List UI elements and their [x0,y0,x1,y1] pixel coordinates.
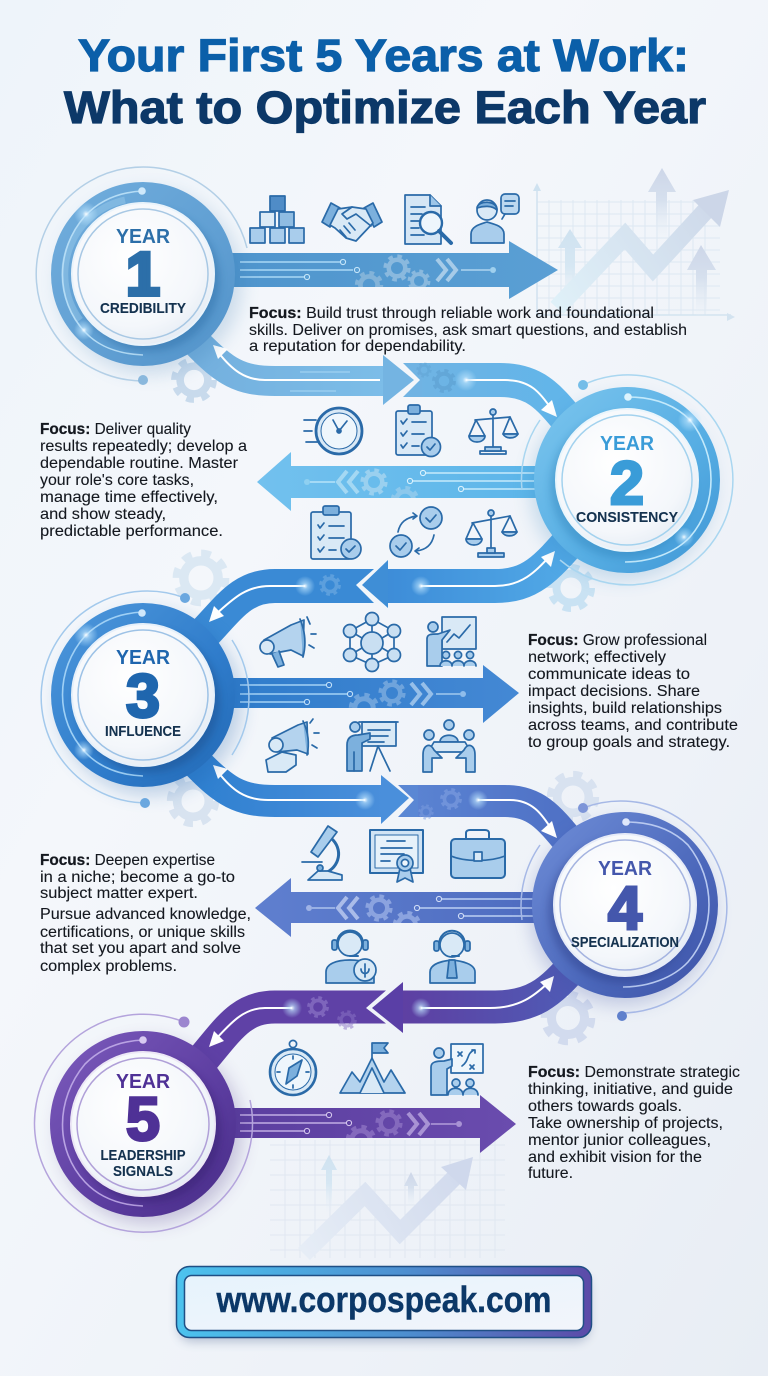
footer url box [176,1266,592,1342]
icon: strategist with plan [431,1044,483,1095]
focus text: year 5: and exhibit vision for the [528,1149,702,1166]
badge: year 3: YEAR [116,646,170,669]
arrow: year 2 [257,452,545,512]
badge: year 2: YEAR [600,432,654,455]
focus text: year 4: that set you apart and solve [40,940,241,957]
focus text: year 2: predictable performance. [40,523,223,540]
icon: certificate [370,830,423,882]
focus text: year 2: your role's core tasks, [40,472,194,489]
icon: stacked blocks [250,196,304,243]
icon: megaphone in hand [266,719,319,772]
arrow: year 3 [225,665,519,723]
badge: year 3: INFLUENCE [105,723,181,740]
badge: year 1: CREDIBILITY [100,300,186,317]
focus text: year 1: Focus: Build trust through reliable work and foundational [249,305,654,322]
badge: year 5: SIGNALS [113,1163,173,1180]
focus text: year 4: subject matter expert. [40,885,198,902]
focus text: year 4: certifications, or unique skills [40,924,245,941]
footer url box: www.corpospeak.com [216,1279,551,1320]
badge: year 1: YEAR [116,225,170,248]
icon: person with speech bubble [471,194,519,243]
icon: presenter with chart [427,617,476,666]
focus text: year 1: a reputation for dependability. [249,338,466,355]
background gears [170,360,596,1042]
focus text: year 2: dependable routine. Master [40,455,239,472]
badge: year 4: YEAR [598,857,652,880]
focus text: year 1 [249,305,687,355]
background chart: bottom [270,1140,505,1258]
icon: briefcase [451,830,505,878]
focus text: year 1: skills. Deliver on promises, ask smart questions, and establish [249,322,687,339]
connector: year 2 to 3 [198,535,575,640]
connector: year 3 to 4 [196,762,580,855]
focus text: year 3: Focus: Grow professional [528,632,707,649]
badge: year 5: LEADERSHIP [100,1147,186,1164]
title [64,30,706,133]
badge: year 4: SPECIALIZATION [571,934,679,951]
arrow: year 5 [225,1095,516,1153]
focus text: year 3: insights, build relationships [528,700,722,717]
focus text: year 5: thinking, initiative, and guide [528,1081,733,1098]
focus text: year 3: communicate ideas to [528,666,690,683]
badge: year 2: 2 [610,449,644,517]
icon: cycle of checks [390,507,442,557]
focus text: year 4: Pursue advanced knowledge, [40,906,251,923]
icon: presenter at easel [347,722,398,771]
focus text: year 2: results repeatedly; develop a [40,438,247,455]
focus text: year 2: and show steady, [40,506,166,523]
icon: network [344,612,400,672]
background chart: top right [533,168,735,321]
arrow: year 1 [225,241,558,299]
badge: year 2: CONSISTENCY [576,509,678,526]
icon: microscope [302,826,342,880]
badge: year 4 [521,801,727,1021]
icon: meeting table [423,720,475,772]
focus text: year 5: others towards goals. [528,1098,682,1115]
icon: handshake [322,203,382,241]
badge: year 5: 5 [126,1085,160,1153]
focus text: year 3: network; effectively [528,649,666,666]
arrow: year 4 [255,878,545,937]
icon: clipboard with check [311,506,361,559]
badge: year 3 [41,591,249,808]
focus text: year 3: impact decisions. Share [528,683,700,700]
badge: year 1 [36,167,247,385]
focus text: year 2 [40,421,247,540]
icon: balance scales two [466,510,517,557]
title: Your First 5 Years at Work: [78,30,689,81]
focus text: year 5: Take ownership of projects, [528,1115,723,1132]
icon: megaphone [260,617,316,667]
badge: year 1: 1 [126,240,160,308]
connector: year 4 to 5 [198,960,578,1065]
icon: headset agent with tie [430,931,475,983]
icon: document with magnifier [405,195,451,244]
focus text: year 5: Focus: Demonstrate strategic [528,1064,740,1081]
focus text: year 3 [528,632,738,751]
icon: clipboard checklist [396,405,440,456]
focus text: year 5: future. [528,1165,573,1182]
icon: balance scales [469,409,518,454]
focus text: year 4: Focus: Deepen expertise [40,852,215,869]
focus text: year 4: complex problems. [40,958,177,975]
badge: year 2 [521,375,733,585]
focus text: year 5 [528,1064,740,1182]
focus text: year 4: in a niche; become a go-to [40,869,235,886]
badge: year 5 [34,1014,252,1232]
focus text: year 3: across teams, and contribute [528,717,738,734]
badge: year 3: 3 [126,662,160,730]
focus text: year 5: mentor junior colleagues, [528,1132,711,1149]
connector: year 1 to 2 [196,342,578,432]
icon: clock [304,408,362,454]
icon: mountain with flag [340,1043,405,1093]
focus text: year 2: Focus: Deliver quality [40,421,191,438]
title: What to Optimize Each Year [64,82,706,133]
badge: year 5: YEAR [116,1070,170,1093]
icon: headset person with mic [326,930,376,983]
badge: year 4: 4 [608,874,642,942]
focus text: year 2: manage time effectively, [40,489,218,506]
focus text: year 4 [40,852,251,975]
icon: compass [270,1040,316,1095]
focus text: year 3: to group goals and strategy. [528,734,730,751]
